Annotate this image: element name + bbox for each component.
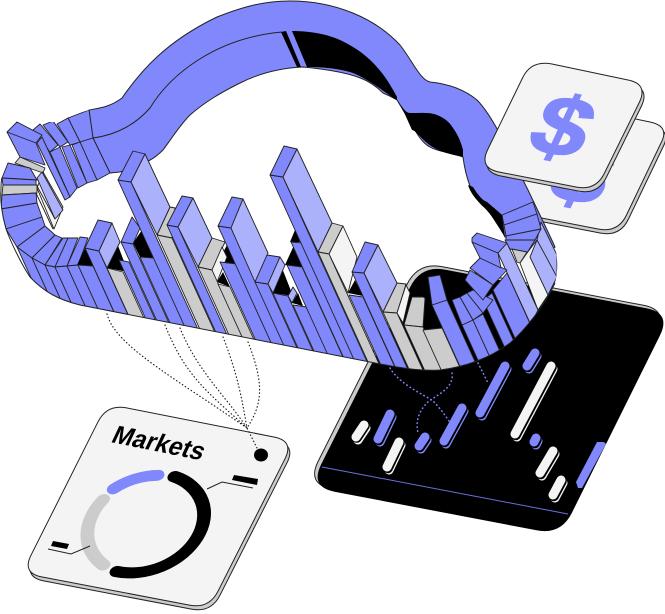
gray ledges and white faces	[157, 207, 425, 327]
short bar top	[121, 217, 140, 244]
markets card rim	[30, 411, 290, 610]
markets heading: Markets	[107, 421, 210, 466]
spike and right fan	[428, 275, 493, 325]
card: markets donut	[28, 407, 290, 610]
stacked blocks right	[465, 233, 507, 300]
black inner wall lower	[397, 98, 463, 157]
card: front dollar card	[485, 63, 644, 192]
card: back dollar card: $	[535, 124, 631, 223]
tall bar tops and light sides	[85, 146, 397, 312]
upper left blocks	[33, 110, 110, 200]
black card rim	[315, 266, 660, 528]
cloud: purple top band	[89, 1, 555, 260]
black inner wall	[292, 31, 397, 100]
cloud: 3D bars	[1, 110, 558, 370]
left legend	[48, 541, 90, 554]
right ring light strips	[498, 222, 557, 325]
card: back dollar card	[524, 118, 665, 234]
left ring segments	[1, 163, 88, 267]
candlesticks	[356, 353, 563, 498]
cloud: bottom outline	[1, 178, 555, 370]
top left block	[7, 122, 45, 165]
left gray ledge	[15, 157, 45, 173]
left inner wall	[36, 172, 63, 229]
markets card face	[28, 407, 288, 606]
bar fronts	[16, 174, 529, 370]
clipped candlestick at card edge	[576, 442, 606, 488]
front card rim	[487, 67, 644, 192]
chart baseline	[322, 467, 568, 514]
card: black candlestick chart	[315, 266, 663, 531]
black stripe	[281, 31, 301, 67]
black card face	[318, 269, 663, 531]
right ring segments	[502, 202, 541, 263]
right legend	[207, 475, 258, 489]
front card face	[485, 63, 642, 188]
donut chart	[68, 466, 223, 582]
band inner ridge line	[93, 32, 282, 138]
dollar sign: $	[515, 77, 611, 176]
dotted connectors on chart	[390, 363, 488, 433]
connector dot	[254, 448, 268, 462]
dotted connectors from cloud to markets card	[107, 314, 260, 450]
black inner wall right	[468, 185, 505, 237]
black gaps between bars	[77, 230, 363, 306]
